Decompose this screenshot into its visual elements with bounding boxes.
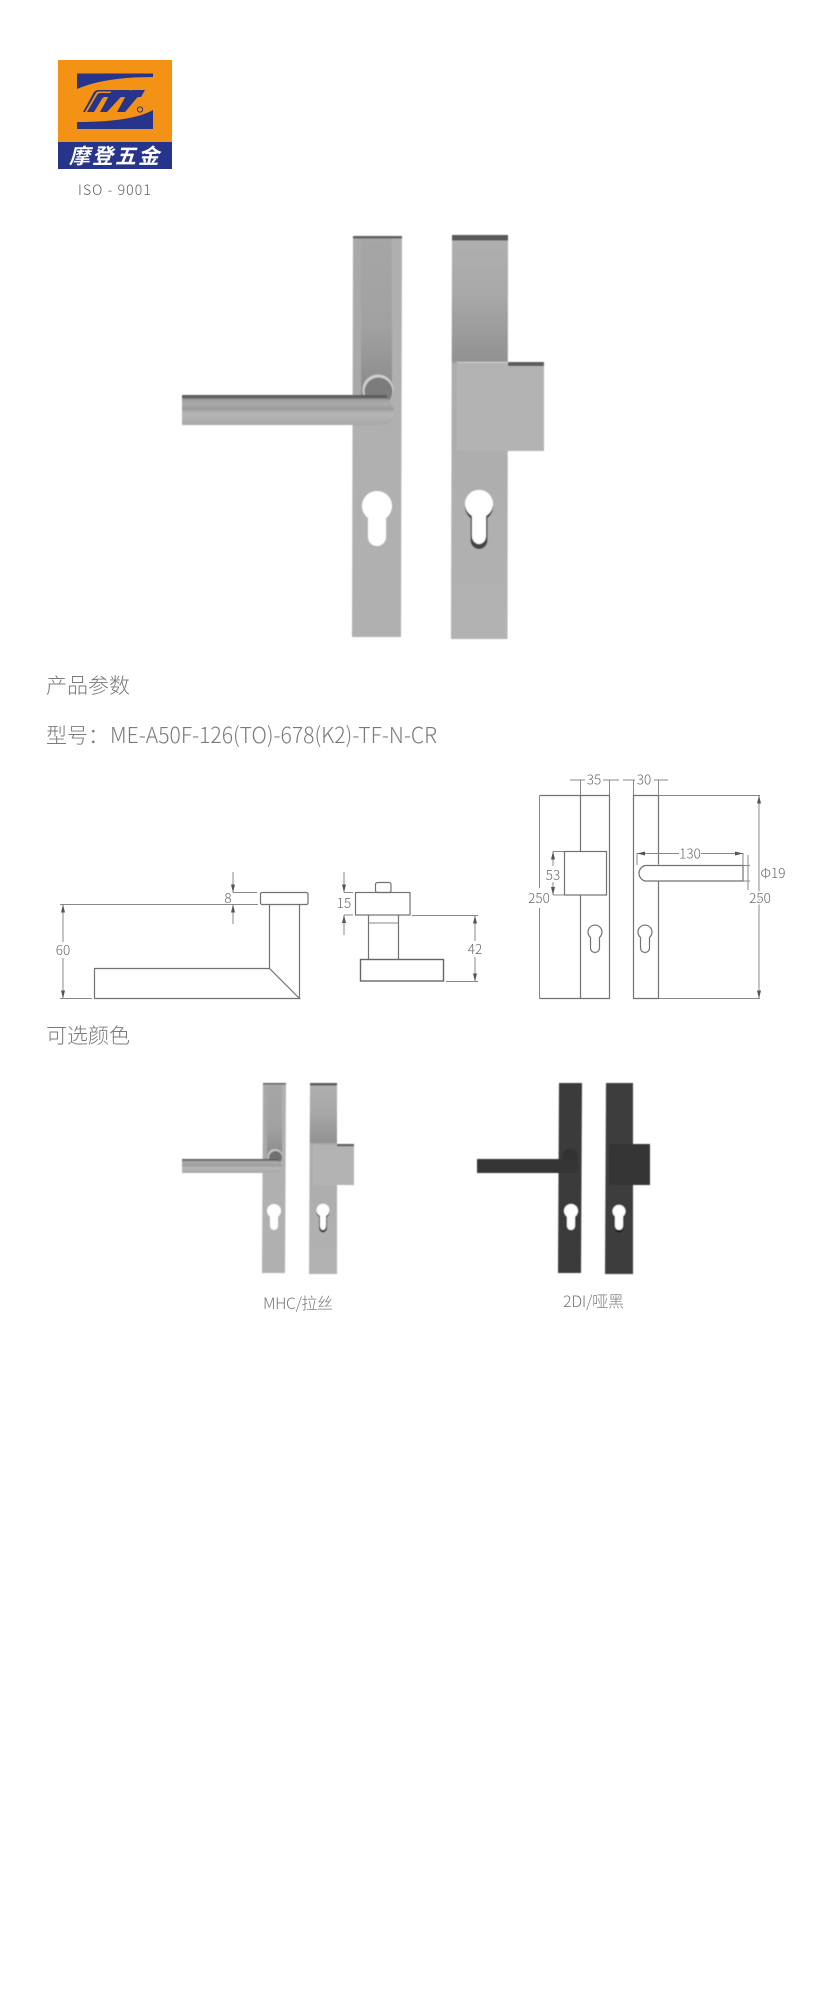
dimension: 130 (637, 842, 743, 862)
matte black: lever bar (477, 1159, 579, 1173)
dimension: 35: 35 (587, 768, 601, 788)
heading: optional colours: 可选颜色 (46, 1020, 130, 1050)
model number: ME-A50F-126(TO)-678(K2)-TF-N-CR (110, 718, 437, 750)
logo: bottom blue arc band (77, 110, 153, 129)
matte black: label: 2DI/哑黑 (563, 1288, 624, 1312)
dimension: 53 (544, 852, 562, 895)
colour option: matte black (477, 1083, 650, 1312)
logo: blue name band (58, 142, 172, 169)
technical drawing: square handle front view (528, 768, 619, 998)
colour option: brushed (182, 1083, 354, 1314)
dimension: 8: 8 (224, 887, 232, 907)
hero: lever handle plate (352, 236, 402, 637)
logo (58, 60, 172, 170)
dimension: 35 (570, 768, 619, 788)
logo: orange field (58, 60, 172, 142)
brushed: square handle plate (309, 1083, 337, 1274)
dimension: 250 right: 250 (749, 887, 771, 907)
dimension: 42 (466, 916, 484, 982)
dimension: phi 19 (748, 855, 785, 890)
technical drawing: handle end view (337, 872, 484, 982)
dimension: 15 (337, 872, 351, 935)
brushed: square handle (313, 1144, 354, 1185)
model number: 型号： (46, 720, 109, 750)
logo: stylised letters (83, 90, 145, 112)
dimension: 60: 60 (56, 939, 70, 959)
dimension: 53: 53 (546, 864, 560, 884)
dimension: 15: 15 (337, 892, 351, 912)
dimension: 30 (623, 768, 668, 788)
logo: company name: 摩登五金 (67, 140, 165, 170)
hero: square-handle plate (451, 235, 508, 639)
brushed: label: MHC/拉丝 (263, 1290, 333, 1314)
hero product: handle and plates (182, 235, 544, 639)
hero: square handle (457, 362, 544, 451)
logo: top blue arc band (77, 74, 153, 89)
matte black: square handle plate (605, 1083, 633, 1274)
hero: lever bar (182, 395, 394, 425)
dimension: phi 19: Φ19 (761, 862, 785, 882)
dimension: 30: 30 (637, 768, 651, 788)
matte black: lever plate (558, 1083, 582, 1273)
dimension: 42: 42 (468, 938, 482, 958)
technical drawing: lever front view (623, 768, 785, 998)
dimension: 60 (55, 904, 71, 998)
matte black: square handle (609, 1144, 650, 1185)
certification label: ISO - 9001 (78, 180, 152, 200)
dimension: 130: 130 (679, 842, 701, 862)
dimension: 8 (224, 872, 233, 924)
heading: product parameters: 产品参数 (46, 670, 130, 700)
logo: registered mark (137, 107, 143, 112)
technical drawing: lever side view (55, 872, 308, 998)
brushed: lever bar (182, 1159, 282, 1173)
dimension: 250 left: 250 (528, 887, 550, 907)
brushed: lever plate (262, 1083, 286, 1273)
